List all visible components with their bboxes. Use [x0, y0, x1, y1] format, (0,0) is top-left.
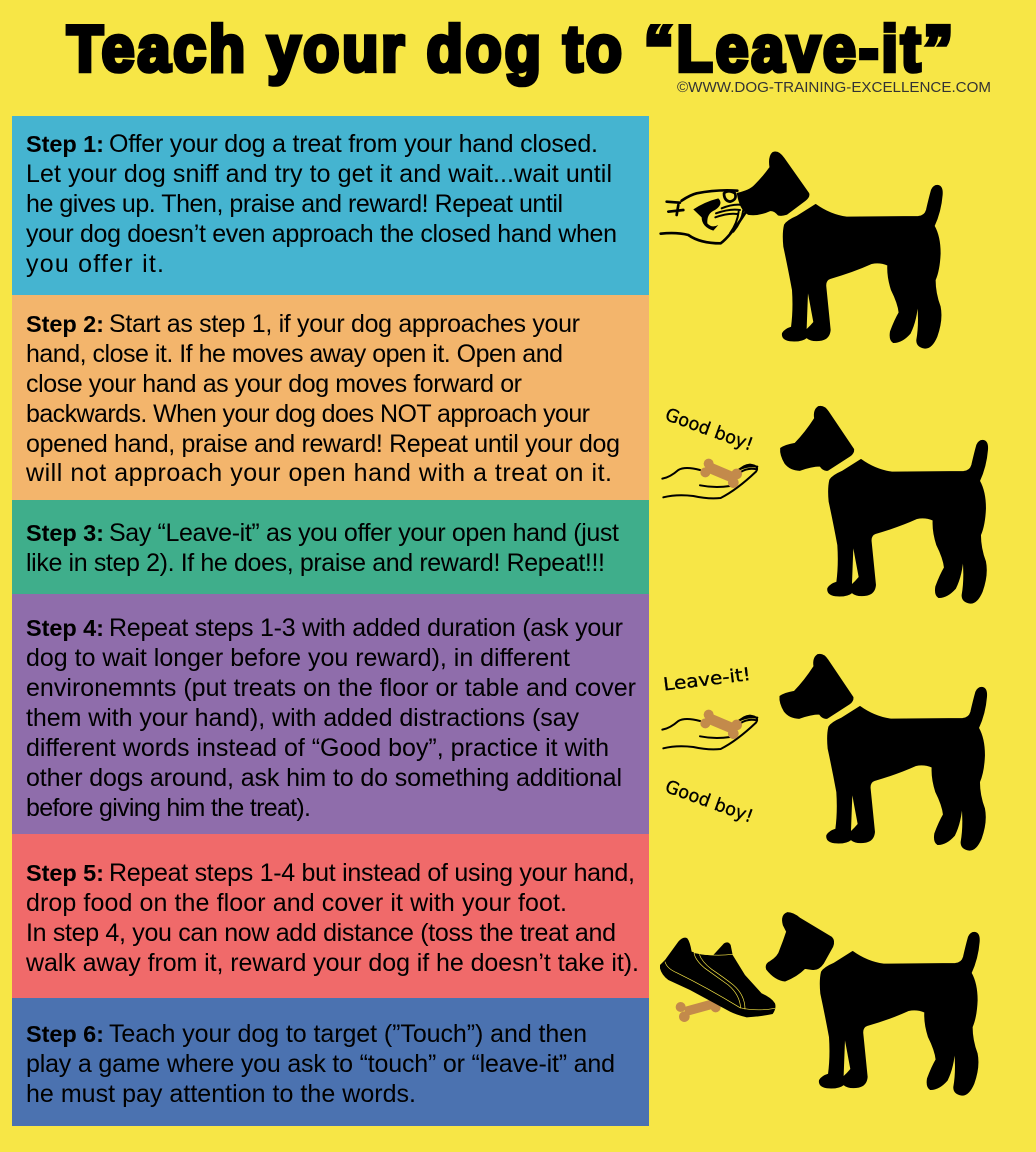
step 4 text: dog to wait longer before you reward), in different [26, 644, 570, 672]
open hand with bone [662, 459, 757, 498]
dog 2 leg gap [852, 548, 859, 584]
step 1 text: he gives up. Then, praise and reward! Repeat until [26, 190, 563, 218]
step 5 text: Repeat steps 1-4 but instead of using your hand, [109, 859, 635, 887]
panel: step 5 [12, 834, 649, 998]
panel: step 1 [12, 116, 649, 295]
step 2 text: Start as step 1, if your dog approaches your [109, 310, 580, 338]
step 4 text: environemnts (put treats on the floor or table and cover [26, 674, 636, 702]
dog 4 head [766, 913, 834, 981]
step 4 text: different words instead of “Good boy”, practice it with [26, 734, 609, 762]
step 6 text: Teach your dog to target (”Touch”) and then [109, 1020, 587, 1048]
speech: good boy: Good boy! [662, 776, 756, 827]
dog 2 head [781, 406, 854, 470]
title: Teach your dog to “Leave-it” [67, 13, 953, 86]
step 2 heading: Step 2: [26, 311, 104, 337]
dog 3 body [827, 688, 986, 850]
step 6 text: play a game where you ask to “touch” or “leave-it” and [26, 1050, 615, 1078]
step 5 text: drop food on the floor and cover it with your foot. [26, 889, 567, 917]
step 5 text [25, 859, 639, 977]
dog 3 head [780, 654, 853, 718]
step 2 text [25, 310, 620, 487]
illustration: dog with open hand, leave-it and good boy [662, 654, 986, 850]
dog 1 head [737, 152, 809, 215]
step 3 text: Say “Leave-it” as you offer your open hand (just [109, 519, 619, 547]
panel: step 2 [12, 295, 649, 500]
step 1 text [26, 130, 617, 278]
illustration: dog with shoe over bone [660, 913, 979, 1095]
speech: good boy: Good boy! [662, 404, 756, 455]
step 4 text [26, 614, 636, 822]
step 2 text: close your hand as your dog moves forward or [26, 370, 522, 398]
step 2 text: hand, close it. If he moves away open it. Open and [26, 340, 563, 368]
step 1 heading: Step 1: [26, 131, 104, 157]
step 5 heading: Step 5: [26, 860, 104, 886]
step 4 text: them with your hand), with added distractions (say [26, 704, 580, 732]
copyright line: ©WWW.DOG-TRAINING-EXCELLENCE.COM [677, 80, 991, 96]
shoe [660, 938, 775, 1017]
step 1 text: Offer your dog a treat from your hand closed. [109, 130, 598, 158]
step 2 text: opened hand, praise and reward! Repeat until your dog [26, 430, 620, 458]
step 3 text: like in step 2). If he does, praise and reward! Repeat!!! [26, 549, 605, 577]
closed hand [661, 190, 745, 243]
step 1 text: your dog doesn’t even approach the closed hand when [26, 220, 617, 248]
step 6 heading: Step 6: [26, 1021, 104, 1047]
illustration: dog sniffing closed hand [661, 152, 942, 348]
step 1 text: Let your dog sniff and try to get it and wait...wait until [26, 160, 612, 188]
step 2 text: will not approach your open hand with a treat on it. [25, 459, 612, 487]
step 4 text: before giving him the treat). [26, 794, 311, 822]
panel: step 4 [12, 594, 649, 834]
dog 4 leg gap [844, 1040, 850, 1076]
bone under shoe [676, 1002, 721, 1022]
step 6 text: he must pay attention to the words. [26, 1080, 416, 1108]
dog 2 body [828, 441, 987, 603]
dog 1 leg gap [807, 293, 813, 329]
panel: step 6 [12, 998, 649, 1126]
dog 3 leg gap [851, 795, 858, 831]
step 1 text: you offer it. [26, 250, 164, 278]
panel: step 3 [12, 500, 649, 594]
step 3 heading: Step 3: [26, 520, 104, 546]
step 5 text: In step 4, you can now add distance (toss the treat and [26, 919, 616, 947]
dog 1 body [783, 186, 942, 348]
step 2 text: backwards. When your dog does NOT approach your [26, 400, 590, 428]
dog 4 body [820, 933, 979, 1095]
step 3 text [26, 519, 619, 577]
step 4 text: Repeat steps 1-3 with added duration (ask your [109, 614, 623, 642]
speech: leave-it: Leave-it! [662, 664, 752, 696]
open hand with bone [662, 710, 757, 749]
step 6 text [26, 1020, 615, 1108]
step 4 heading: Step 4: [26, 615, 104, 641]
step 4 text: other dogs around, ask him to do something additional [26, 764, 622, 792]
step 5 text: walk away from it, reward your dog if he doesn’t take it). [25, 949, 639, 977]
illustration: dog with open hand, good boy [662, 404, 987, 603]
